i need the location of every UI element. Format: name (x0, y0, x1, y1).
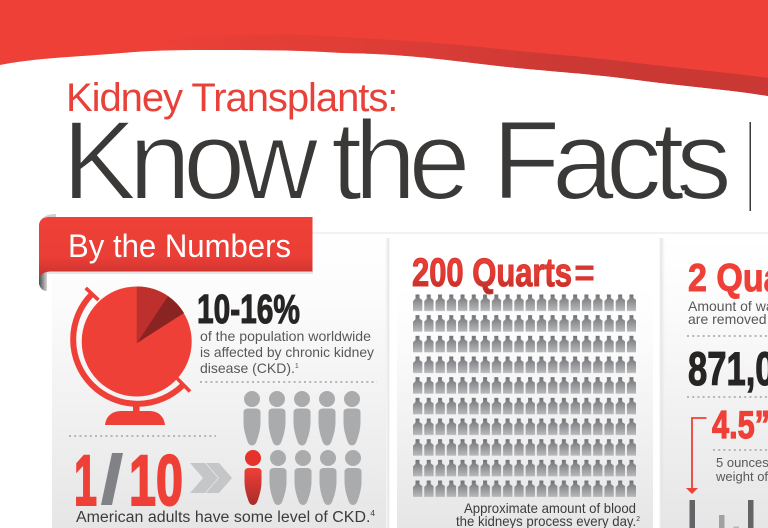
text: population description: of the population worldwide (200, 328, 371, 344)
icon: people ten (244, 391, 362, 505)
panel background (661, 238, 768, 528)
text: population description: is affected by chronic kidney (200, 344, 374, 360)
banner heading: By the Numbers (68, 228, 291, 264)
top card edge (312, 232, 768, 234)
panel background (397, 285, 653, 528)
chart: bars (690, 500, 754, 528)
text: blood caption: 2 (636, 516, 640, 523)
icon: chevrons (190, 463, 232, 493)
stat: 1/10: 1 (74, 442, 97, 521)
dotted divider (687, 335, 768, 337)
stat: 1/10: 10 (129, 442, 183, 521)
text: blood caption: Approximate amount of blood (464, 501, 636, 516)
main title: Know the Facts: Facts (492, 98, 728, 223)
heading: 200 Quarts: 200 Quarts (412, 251, 572, 295)
arrow: kidney height (686, 418, 706, 494)
title rule (750, 122, 751, 211)
panel: by the numbers (52, 234, 390, 528)
banner: by the numbers (39, 214, 313, 291)
text: kidney weight: 5 ounces (716, 455, 768, 470)
title (62, 76, 751, 223)
panel: 2 quarts (659, 238, 768, 528)
panel background (52, 234, 386, 528)
heading: 200 Quarts: = (574, 251, 595, 295)
text: kidney weight: weight of (715, 469, 768, 484)
stat: 1/10 (74, 442, 183, 521)
text: American adults: American adults have some level of CKD. (76, 509, 362, 526)
text: population description (200, 328, 374, 376)
chart: bottle pictogram (413, 294, 636, 497)
dotted divider (200, 381, 377, 383)
main title: Know the Facts: Know (62, 98, 319, 223)
text: population description: 1 (295, 363, 299, 370)
panel: 200 quarts (397, 251, 653, 528)
text: American adults: 4 (370, 509, 376, 518)
main title: Know the Facts: the (331, 98, 466, 223)
text: waste amount (688, 298, 768, 327)
text: population description: disease (CKD). (200, 360, 295, 376)
stat: 10-16%: 10-16% (197, 286, 300, 332)
main title: Know the Facts (62, 98, 728, 223)
text: kidney weight (715, 455, 768, 484)
icon: globe pie chart (73, 286, 192, 425)
red header wave (0, 0, 768, 96)
text: blood caption (456, 501, 640, 528)
subtitle: Kidney Transplants: Kidney Transplants: (66, 76, 397, 120)
